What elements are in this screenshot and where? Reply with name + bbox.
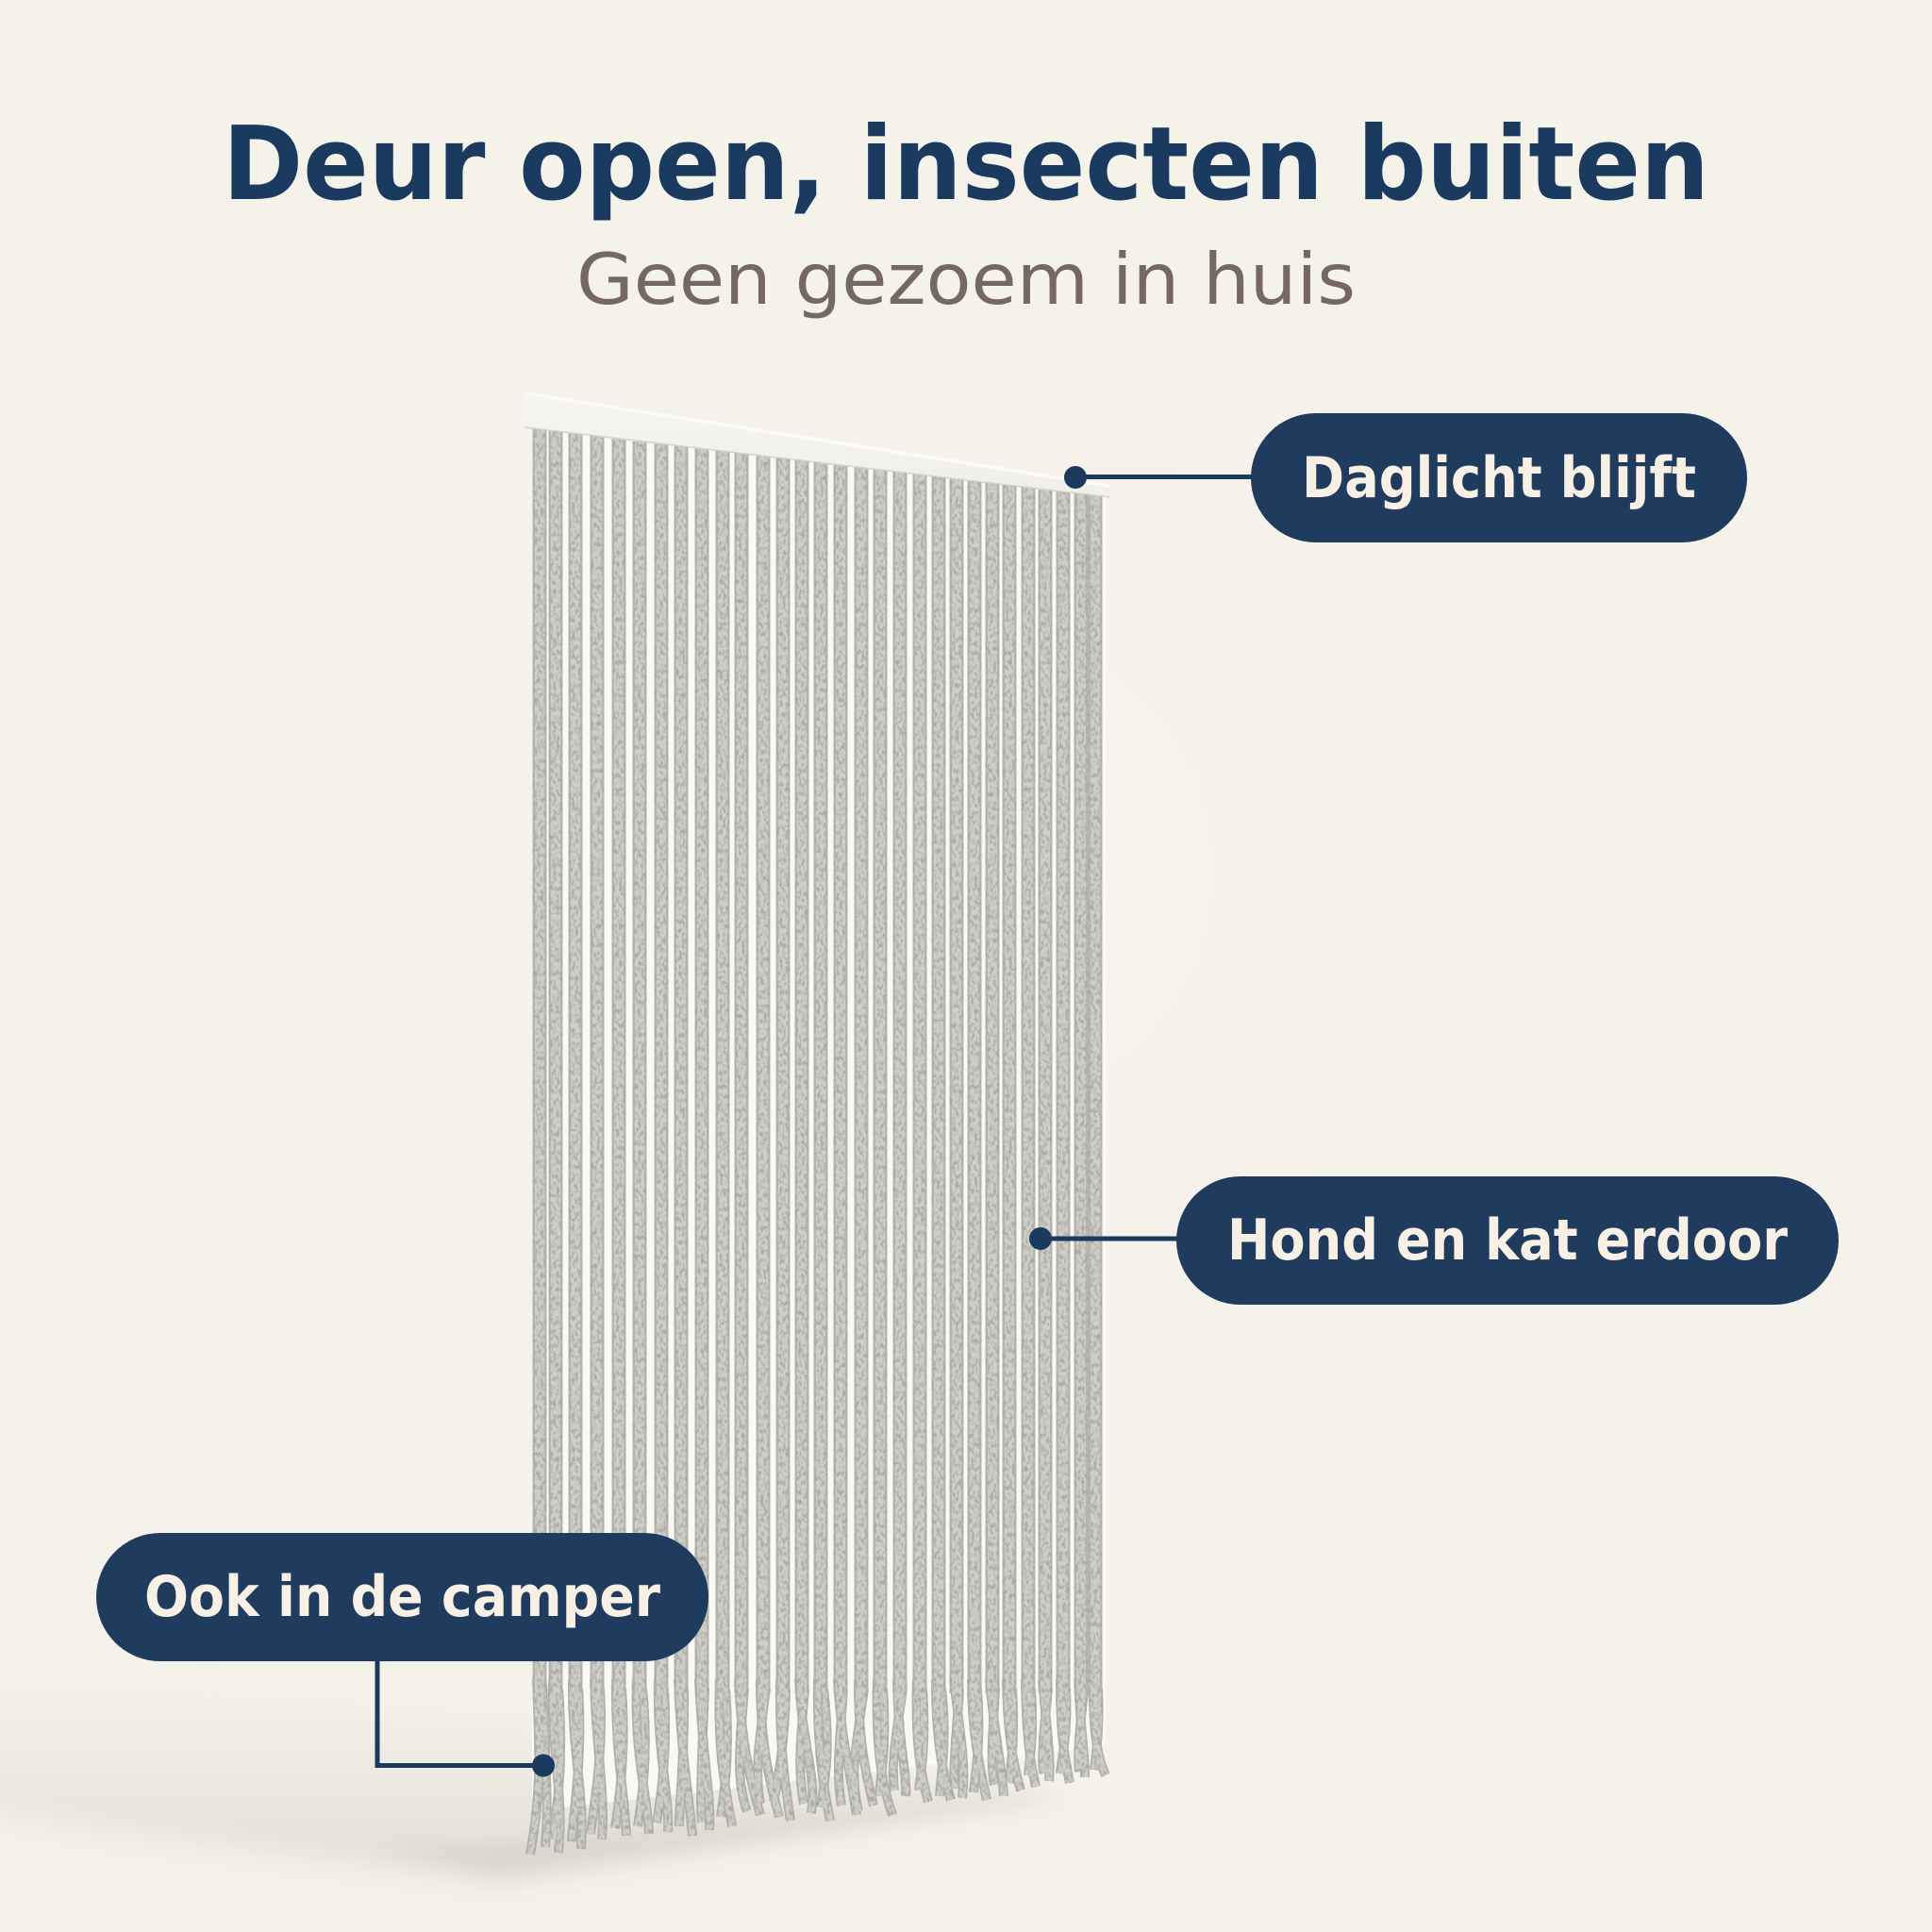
- pill label: Daglicht blijft: [1302, 445, 1696, 511]
- callout: Daglicht blijft: [1064, 413, 1747, 542]
- connector line: [1075, 475, 1255, 479]
- product: cord door curtain: [522, 392, 1109, 1855]
- mounting rail: [522, 392, 1109, 497]
- curtain backing glow between cords: [532, 425, 1106, 1811]
- pill label: Hond en kat erdoor: [1227, 1208, 1788, 1274]
- callout: Hond en kat erdoor: [1029, 1176, 1839, 1305]
- pill: [96, 1533, 708, 1661]
- marker dot: [1029, 1227, 1052, 1250]
- title: Deur open, insecten buiten: [223, 106, 1709, 224]
- floor shadow: [0, 1679, 1066, 1881]
- elbow connector line: [377, 1656, 543, 1766]
- callout: Ook in de camper: [96, 1533, 708, 1777]
- pill label: Ook in de camper: [144, 1564, 660, 1630]
- marker dot: [532, 1755, 555, 1777]
- pill: [1176, 1176, 1839, 1305]
- subtitle: Geen gezoem in huis: [576, 238, 1356, 321]
- curtain cords: [530, 429, 1106, 1855]
- connector line: [1041, 1236, 1180, 1241]
- marker dot: [1064, 466, 1087, 489]
- pill: [1251, 413, 1747, 542]
